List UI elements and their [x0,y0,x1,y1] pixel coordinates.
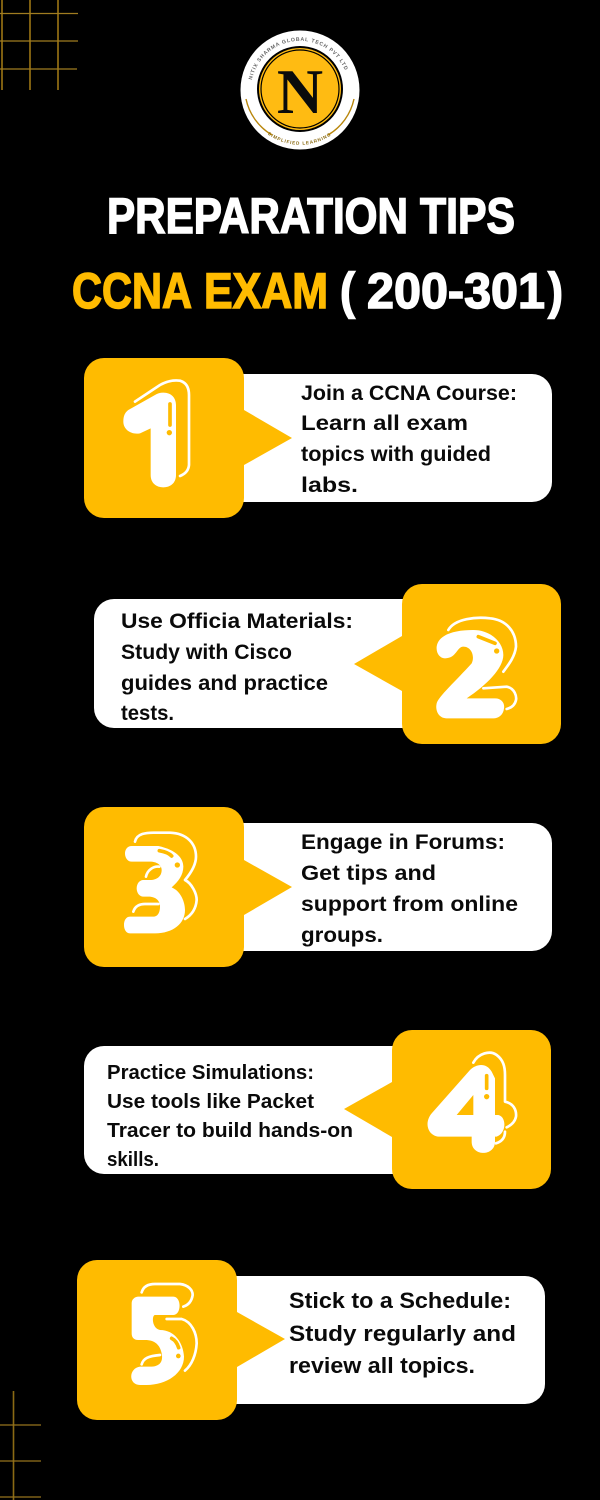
heading: preparation tips: PREPARATION [107,188,408,244]
panel: step 5 [77,1260,545,1420]
heading: exam code: ) [548,263,563,319]
step text: Tracer to build hands-on [107,1120,353,1142]
panel: step 2 [94,584,561,744]
number badge [344,1030,551,1189]
number badge [354,584,561,744]
panel: step 4 [84,1030,551,1189]
icon: number 3 [124,833,197,933]
step text: review all topics. [289,1353,475,1378]
number badge [84,358,292,518]
logo [240,30,360,150]
step text: topics with guided [301,442,491,466]
step text: Study regularly and [289,1321,516,1346]
icon: number 5 [131,1284,197,1385]
step text: Stick to a Schedule: [289,1288,511,1313]
heading: exam code: 200-301 [367,263,545,319]
icon: number 4 [428,1053,516,1153]
heading: ccna exam: EXAM [204,263,328,319]
step text: guides and practice [121,671,328,695]
white text bar [223,1276,545,1404]
step text: Engage in Forums: [301,830,505,854]
heading: ccna exam: CCNA [72,263,192,319]
step text: groups. [301,923,383,947]
white text bar [94,599,416,728]
heading: preparation tips: TIPS [420,188,515,244]
white text bar [230,823,552,951]
step text: Use tools like Packet [107,1091,314,1113]
step text: Learn all exam [301,411,468,435]
logo: SIMPLIFIED LEARNING [268,132,330,145]
step text: Practice Simulations: [107,1062,314,1084]
logo: NITIX SHARMA GLOBAL TECH PVT LTD [248,37,348,80]
step text: labs. [301,473,358,497]
panel: step 3 [84,807,552,967]
step text: Study with Cisco [121,640,292,664]
number badge [84,807,292,967]
step text: Use Officia Materials: [121,609,353,633]
number badge [77,1260,285,1420]
step text: Get tips and [301,861,436,885]
step text: skills. [107,1149,159,1171]
step text: tests. [121,701,174,725]
step text: Join a CCNA Course: [301,381,517,405]
heading: exam code: ( [340,263,355,319]
logo: N [277,56,323,127]
step text: support from online [301,892,518,916]
panel: step 1 [84,358,552,518]
white text bar [84,1046,406,1174]
white text bar [230,374,552,502]
title [72,188,563,319]
icon: number 2 [436,618,516,718]
icon: number 1 [123,380,189,487]
